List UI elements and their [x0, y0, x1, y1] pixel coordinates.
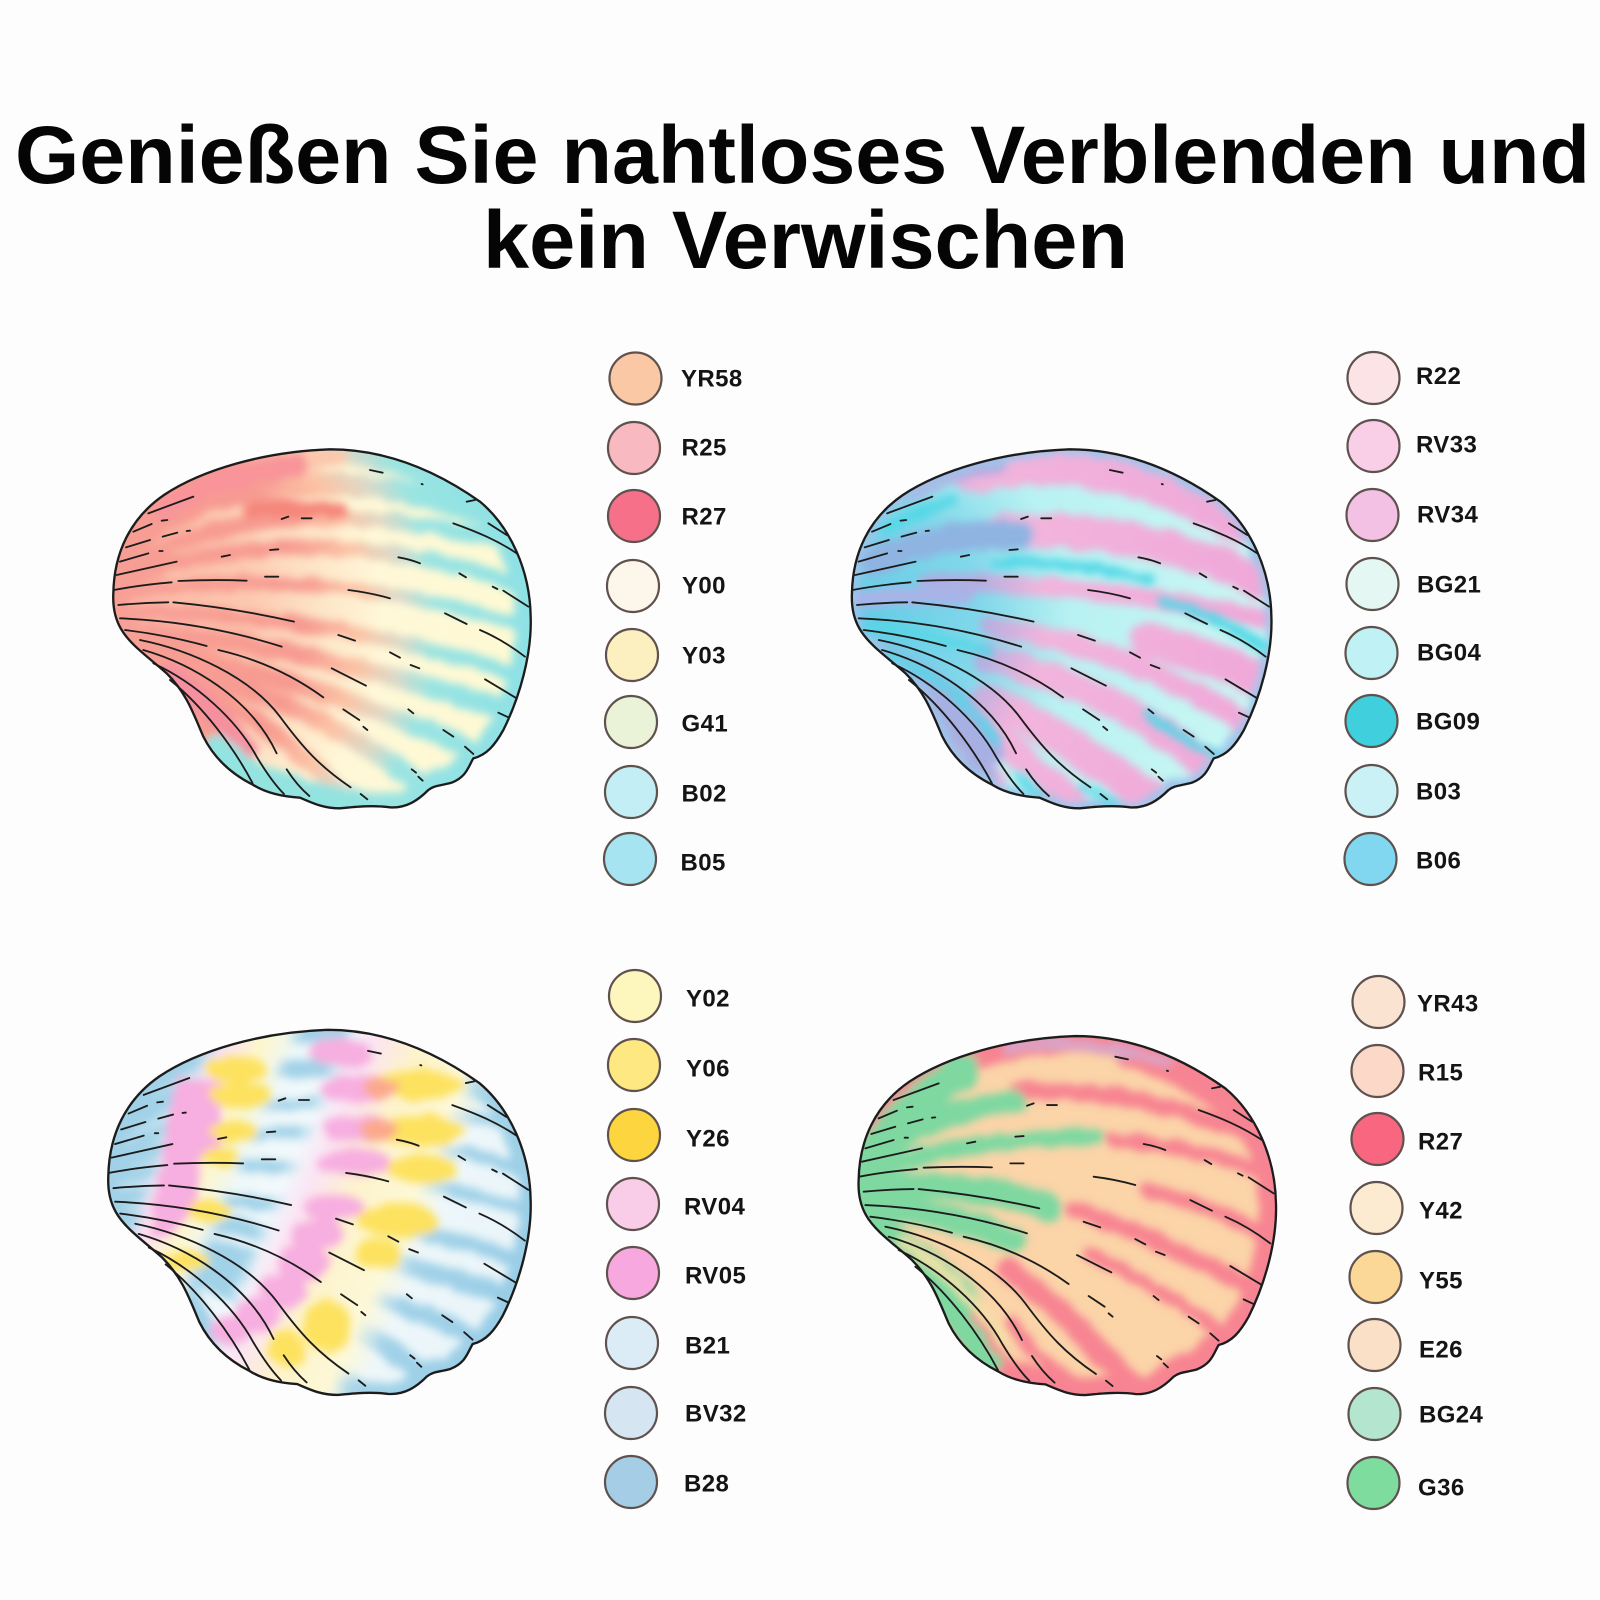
- swatch B02: B02: [682, 780, 727, 808]
- title: kein Verwischen: [483, 195, 1128, 286]
- panel: warm coral to turquoise shell: [113, 352, 743, 885]
- shell illustration: coral, cream and turquoise: [113, 449, 531, 810]
- swatch Y42: [1350, 1182, 1463, 1234]
- swatch RV34: [1346, 489, 1478, 541]
- swatch Y06: [608, 1039, 730, 1091]
- swatch R27: R27: [682, 504, 727, 530]
- swatch BG24: BG24: [1419, 1402, 1484, 1428]
- swatch BV32: [605, 1387, 747, 1439]
- shell illustration: green, orange and red: [859, 1036, 1276, 1395]
- swatch Y03: [606, 629, 726, 681]
- swatch B28: B28: [684, 1470, 729, 1498]
- swatch Y03: Y03: [682, 642, 726, 670]
- swatch R25: R25: [682, 434, 727, 462]
- swatch B21: B21: [685, 1332, 730, 1360]
- swatch R27: R27: [1418, 1128, 1463, 1156]
- swatch Y26: [608, 1109, 730, 1161]
- swatch RV05: [607, 1247, 746, 1299]
- swatch B03: [1346, 765, 1461, 817]
- swatch G41: [605, 696, 728, 748]
- swatch BG24: [1348, 1388, 1484, 1440]
- shell illustration: pink, lavender and cyan: [852, 449, 1271, 808]
- swatch Y55: Y55: [1419, 1268, 1463, 1294]
- swatch BG09: [1346, 695, 1480, 747]
- swatch Y00: Y00: [682, 572, 726, 600]
- swatch E26: E26: [1419, 1336, 1463, 1364]
- swatch Y02: [609, 970, 730, 1022]
- swatch RV04: RV04: [684, 1194, 745, 1220]
- swatch E26: [1348, 1319, 1463, 1371]
- shell illustration: yellow, pink and blue patches: [108, 1030, 531, 1395]
- swatch BG21: [1346, 558, 1481, 610]
- swatch legend: warm set: [604, 352, 743, 885]
- swatch BG04: BG04: [1417, 640, 1482, 666]
- swatch BG21: BG21: [1417, 572, 1481, 598]
- swatch G36: [1348, 1457, 1465, 1509]
- swatch BG04: [1346, 627, 1482, 679]
- swatch YR58: YR58: [681, 366, 743, 392]
- panel: pink and cyan shell: [852, 352, 1482, 885]
- swatch YR43: YR43: [1417, 990, 1479, 1018]
- swatch B05: B05: [680, 850, 726, 876]
- swatch Y26: Y26: [686, 1126, 730, 1152]
- swatch G41: G41: [682, 710, 728, 738]
- swatch legend: cool set: [1344, 352, 1482, 885]
- swatch R27: [608, 490, 727, 542]
- swatch Y06: Y06: [686, 1056, 730, 1082]
- swatch R15: [1352, 1045, 1463, 1097]
- swatch legend: pastel set: [605, 970, 747, 1508]
- swatch Y00: [607, 560, 726, 612]
- swatch B06: B06: [1416, 848, 1461, 874]
- swatch legend: earthy set: [1348, 976, 1484, 1509]
- swatch Y55: [1350, 1251, 1463, 1303]
- swatch RV33: RV33: [1416, 432, 1477, 458]
- swatch B06: [1344, 833, 1461, 885]
- swatch B03: B03: [1416, 778, 1461, 806]
- swatch B05: [604, 833, 726, 885]
- swatch YR58: [610, 352, 743, 404]
- title: [15, 110, 1590, 286]
- swatch RV33: [1348, 420, 1477, 472]
- swatch Y42: Y42: [1419, 1198, 1463, 1224]
- swatch B28: [605, 1456, 729, 1508]
- swatch R15: R15: [1418, 1060, 1463, 1086]
- swatch B02: [605, 766, 727, 818]
- swatch RV34: RV34: [1417, 502, 1478, 528]
- swatch R22: [1348, 352, 1461, 404]
- swatch RV04: [607, 1178, 745, 1230]
- swatch Y02: Y02: [686, 986, 730, 1012]
- swatch BV32: BV32: [685, 1400, 747, 1428]
- swatch YR43: [1352, 976, 1479, 1028]
- swatch B21: [606, 1317, 730, 1369]
- swatch R27: [1352, 1113, 1463, 1165]
- panel: green, orange and red shell: [859, 976, 1484, 1509]
- swatch RV05: RV05: [685, 1262, 746, 1290]
- swatch G36: G36: [1418, 1474, 1465, 1502]
- swatch BG09: BG09: [1416, 708, 1480, 736]
- panel: yellow, pink and blue shell: [108, 970, 747, 1508]
- swatch R22: R22: [1416, 363, 1461, 390]
- title: Genießen Sie nahtloses Verblenden und: [15, 110, 1590, 201]
- swatch R25: [608, 422, 727, 474]
